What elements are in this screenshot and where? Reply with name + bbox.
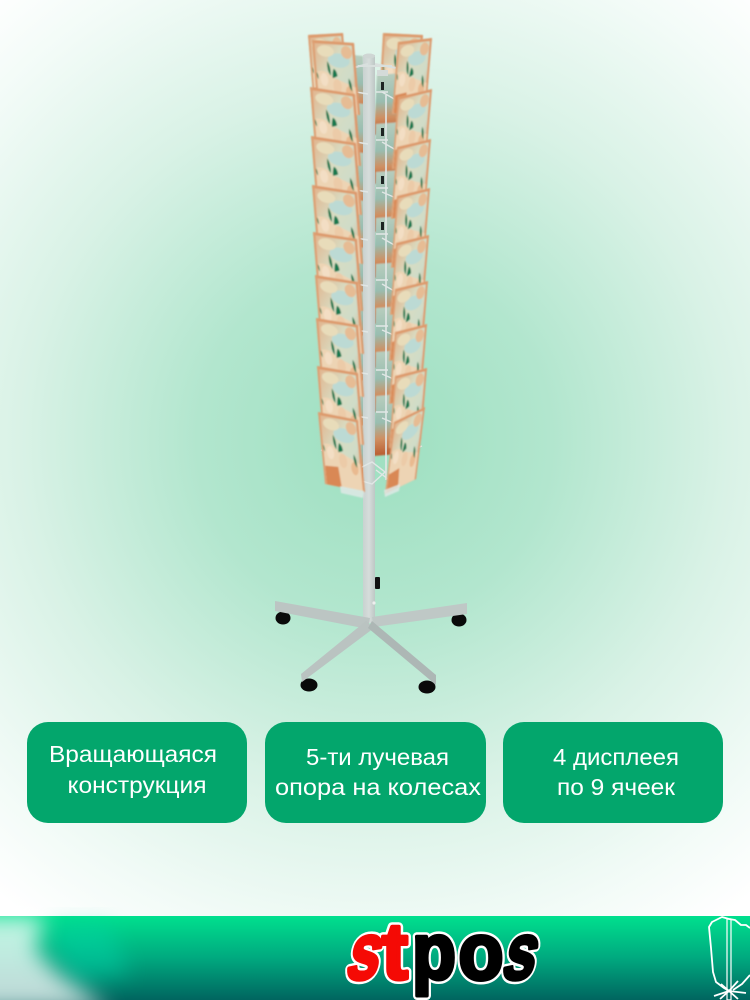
feature card: rotating construction: конструкция (68, 772, 206, 798)
logo: stpos: s (340, 907, 394, 997)
feature card: five-ray base: опора на колесах (275, 774, 482, 800)
product: rotating card stand (275, 33, 467, 694)
logo: stpos: s (496, 907, 550, 997)
right front cards (385, 38, 432, 494)
back rows of cards (308, 33, 423, 488)
feature card: five-ray base (265, 722, 486, 823)
icon: feather mark (709, 917, 750, 1000)
logo: stpos: t (382, 907, 408, 996)
gaps behind the right cards (381, 82, 384, 230)
wheels (276, 612, 466, 694)
logo: stpos: p (412, 907, 456, 996)
logo: stpos: s (340, 907, 394, 997)
feature card: four displays (503, 722, 723, 823)
wire holders (321, 92, 422, 484)
five-ray base (275, 601, 467, 685)
feature card: five-ray base: 5-ти лучевая (306, 744, 449, 770)
feature card: four displays: 4 дисплеея (553, 744, 679, 770)
feature card: rotating construction (27, 722, 247, 823)
feature card: rotating construction: Вращающаяся (49, 741, 217, 767)
feature card: four displays: по 9 ячеек (557, 774, 676, 800)
logo: stpos (340, 907, 550, 997)
logo: stpos: t (382, 907, 408, 996)
logo: stpos: s (496, 907, 550, 997)
logo: stpos: o (458, 907, 504, 996)
left front cards (310, 40, 365, 492)
latch on pole (375, 577, 380, 589)
bottom clear holders (340, 484, 400, 498)
top hub (352, 54, 396, 76)
logo: stpos: p (412, 907, 456, 996)
pole (363, 55, 375, 623)
footer band (0, 916, 750, 1000)
logo: stpos: o (458, 907, 504, 996)
